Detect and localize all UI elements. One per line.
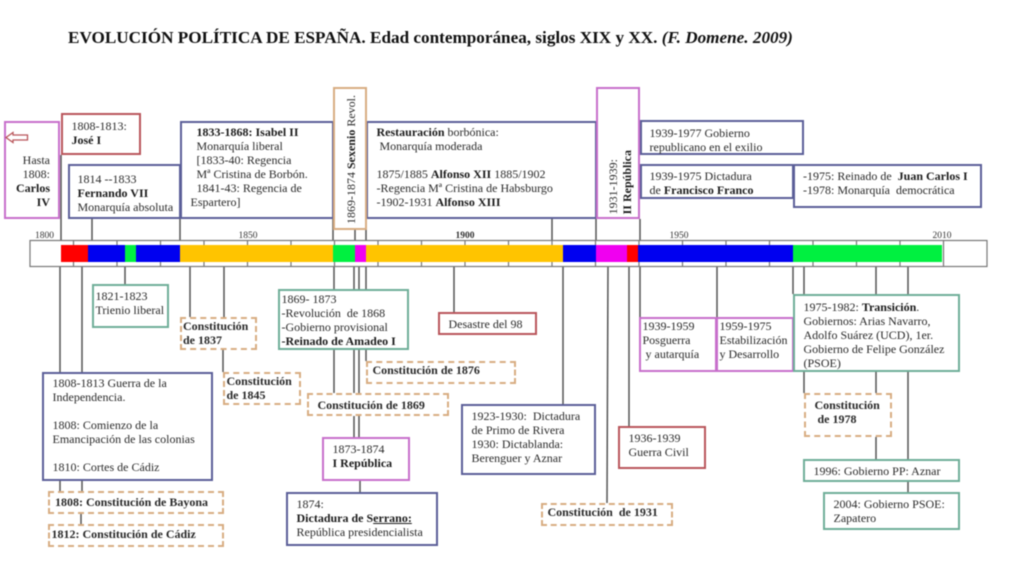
box: Gobierno Zapatero [823, 492, 960, 530]
box: II República: 1931-1939: II República [606, 150, 634, 214]
timeline year labels [35, 231, 952, 241]
box: Guerra Civil: 1936-1939 Guerra Civil [628, 431, 689, 459]
timeline year labels: 1850 [238, 231, 258, 241]
box: Desastre del 98 [438, 312, 537, 335]
box: Constitución de 1876: Constitución de 1876 [372, 363, 480, 377]
box: Desastre del 98: Desastre del 98 [448, 317, 522, 331]
box: Constitución de 1869: Constitución de 1869 [318, 398, 425, 412]
box: Constitución de Cádiz [48, 524, 224, 547]
box: Constitución de 1869 [307, 393, 449, 416]
box: Gobierno en el exilio: 1939-1977 Gobierno republicano en el exilio [650, 126, 762, 154]
box: I República [322, 437, 410, 481]
box: Sexenio Revolucionario: 1869-1874 Sexenio Revol. [344, 95, 358, 224]
box: Posguerra y autarquía: 1939-1959 Posguerra y autarquía [642, 319, 699, 361]
timeline year labels: 1900 [456, 231, 475, 241]
box: Estabilización y Desarrollo [716, 317, 794, 372]
box: Primo de Rivera: 1923-1930: Dictadura de Primo de Rivera 1930: Dictablanda: Berenguer y Aznar [472, 409, 580, 465]
box: José I [61, 113, 141, 155]
box: Constitución de Bayona: 1808: Constitución de Bayona [55, 495, 208, 509]
box: Carlos IV: Hasta 1808: Carlos IV [16, 153, 50, 209]
box: Fernando VII: 1814 --1833 Fernando VII Monarquía absoluta [78, 172, 173, 214]
icon: left arrow [4, 131, 29, 144]
box: Restauración: Restauración borbónica: Monarquía moderada 1875/1885 Alfonso XII 1885/1902 -Regencia Mª Cristina de Habsburgo -1902-1931 Alfonso XIII [376, 125, 553, 209]
timeline frame and ticks [30, 240, 987, 267]
box: Juan Carlos I [793, 164, 982, 208]
box: Primo de Rivera [461, 404, 596, 475]
box: Dictadura de Serrano: 1874: Dictadura de Serrano: República presidencialista [296, 497, 423, 539]
box: Constitución de 1845: Constitución de 1845 [226, 374, 292, 402]
box: Constitución de Bayona [48, 491, 224, 514]
box: Carlos IV [4, 121, 60, 219]
box: Guerra Civil [618, 426, 706, 469]
box: Fernando VII [68, 164, 181, 219]
timeline year labels: 2010 [932, 231, 952, 241]
box: Constitución de 1837: Constitución de 1837 [183, 319, 248, 347]
box: Constitución de 1978: Constitución de 1978 [814, 398, 880, 426]
box: I República: 1873-1874 I República [332, 442, 392, 470]
box: Dictadura de Serrano [286, 492, 438, 546]
box: Estabilización y Desarrollo: 1959-1975 Estabilización y Desarrollo [720, 319, 787, 361]
box: Trienio liberal [92, 284, 169, 328]
box: Isabel II [180, 121, 334, 219]
box: II República [596, 87, 640, 219]
box: Restauración [366, 121, 597, 219]
box: Constitución de 1931: Constitución de 1931 [548, 505, 658, 519]
box: Isabel II: 1833-1868: Isabel II Monarquía liberal [1833-40: Regencia Mª Cristina de Borbón. 1841-43: Regencia de Espartero] [190, 125, 308, 209]
box: Gobierno Aznar: 1996: Gobierno PP: Aznar [814, 464, 940, 478]
box: Gobierno en el exilio [640, 120, 804, 155]
box: Constitución de Cádiz: 1812: Constitución de Cádiz [52, 527, 196, 541]
box: Sexenio Revolucionario [333, 87, 367, 230]
box: Guerra de la Independencia: 1808-1813 Guerra de la Independencia. 1808: Comienzo de la Emancipación de las colonias 1810: Cortes de Cádiz [52, 376, 195, 474]
box: Juan Carlos I: -1975: Reinado de Juan Carlos I -1978: Monarquía democrática [803, 169, 968, 197]
box: José I: 1808-1813: José I [72, 119, 127, 147]
timeline year labels: 1950 [670, 231, 689, 241]
box: Trienio liberal: 1821-1823 Trienio liberal [96, 289, 164, 317]
box: Constitución de 1978 [804, 393, 892, 437]
title: EVOLUCIÓN POLÍTICA DE ESPAÑA. Edad contemporánea, siglos XIX y XX. (F. Domene. 2009) [68, 28, 793, 47]
box: Sexenio detalle: 1869- 1873 -Revolución de 1868 -Gobierno provisional -Reinado de Amadeo I [282, 292, 396, 348]
box: Posguerra y autarquía [639, 317, 717, 372]
box: Constitución de 1876 [366, 361, 516, 384]
box: Constitución de 1931 [541, 503, 673, 526]
box: Francisco Franco [640, 164, 794, 199]
box: Gobierno Aznar [803, 459, 960, 482]
timeline year labels: 1800 [35, 231, 54, 241]
box: Gobierno Zapatero: 2004: Gobierno PSOE: Zapatero [834, 497, 945, 525]
box: Transición: 1975-1982: Transición. Gobiernos: Arias Navarro, Adolfo Suárez (UCD), 1er. Gobierno de Felipe González (PSOE) [804, 300, 944, 370]
timeline colour segments [61, 245, 942, 262]
box: Francisco Franco: 1939-1975 Dictadura de Francisco Franco [650, 169, 753, 197]
